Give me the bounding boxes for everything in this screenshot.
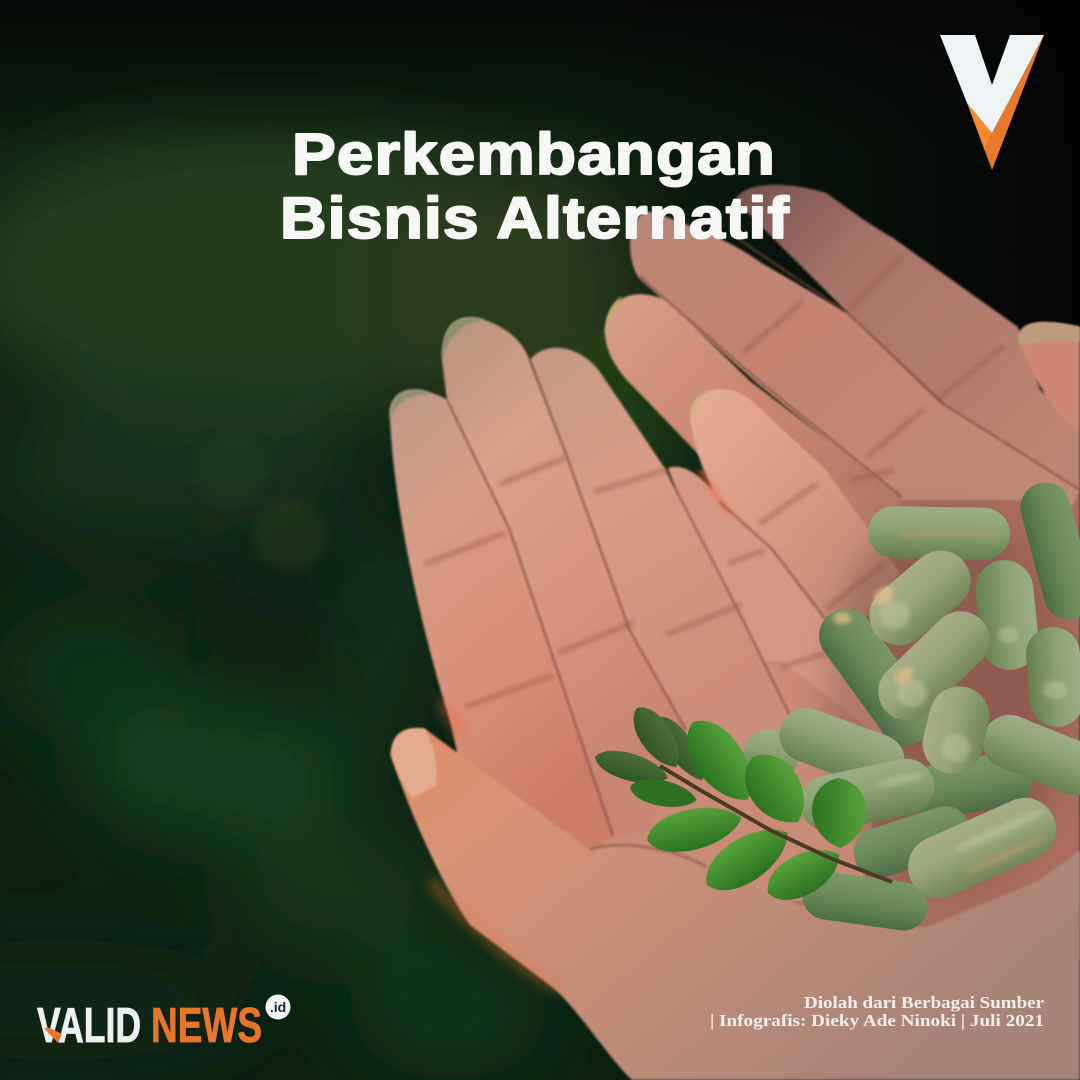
capsule [772,700,912,796]
logo: Validnews.id wordmark: VALID [37,999,141,1053]
finger: pinky [668,467,895,760]
red rim light on fourth finger [700,470,730,515]
leaf [732,742,819,836]
red rim light on first finger base [440,700,462,735]
leaf [673,708,767,814]
capsule [1015,477,1080,625]
leaf [628,774,699,812]
logo: Validnews.id wordmark [37,994,290,1053]
leaf [624,699,690,776]
orange rim light on thumb [430,880,560,990]
credits: Diolah dari Berbagai Sumber [804,993,1045,1012]
finger: third rear [605,294,902,560]
leaf [811,777,867,849]
warm sheen on capsules [833,583,917,688]
front hand [390,317,1080,1080]
title: Perkembangan [292,122,776,187]
capsule shadow pool [825,510,1065,890]
title [280,122,790,251]
leafy sprig [591,699,892,911]
leaf [649,710,713,787]
logo: Validnews.id wordmark: .id [270,999,286,1015]
credits [710,993,1045,1030]
capsule [898,788,1066,908]
finger: second front [442,317,686,840]
capsule end highlights [875,601,1067,855]
leaf [695,814,799,903]
capsule [1024,625,1080,729]
warm streaks on capsules [900,532,1048,877]
logo: Validnews.id wordmark: NEWS [151,999,262,1053]
finger: third front [530,348,790,760]
capsule [847,800,977,884]
leaf [758,837,849,911]
finger: first front [390,390,613,860]
finger: top rear [735,185,1080,490]
capsule [866,599,1002,733]
leaf [591,744,672,791]
capsule [795,753,939,837]
finger separators [447,238,1080,867]
finger: second rear [630,212,1080,530]
finger: far right [1018,322,1080,430]
palm centre [460,660,885,905]
capsule [799,868,931,934]
capsule [808,598,944,756]
capsule [972,557,1042,673]
fingernails [390,296,1080,798]
capsule [868,506,1010,560]
capsules [739,477,1080,934]
capsule [739,726,803,784]
capsule [907,748,1037,822]
creases [425,256,1005,707]
rear hand fingers [605,185,1080,960]
title: Bisnis Alternatif [280,186,790,251]
lower palm and thumb [391,728,1080,1080]
skin behind capsules [680,470,1080,960]
leaf [642,798,746,860]
stem [660,766,892,882]
capsule [857,538,983,658]
pinky and palm centre of front hand [460,389,900,905]
capsule [974,707,1080,803]
capsule [916,680,996,780]
logo: V mark [940,35,1044,170]
credits: | Infografis: Dieky Ade Ninoki | Juli 2021 [710,1011,1044,1030]
finger: fourth rear [690,389,900,625]
